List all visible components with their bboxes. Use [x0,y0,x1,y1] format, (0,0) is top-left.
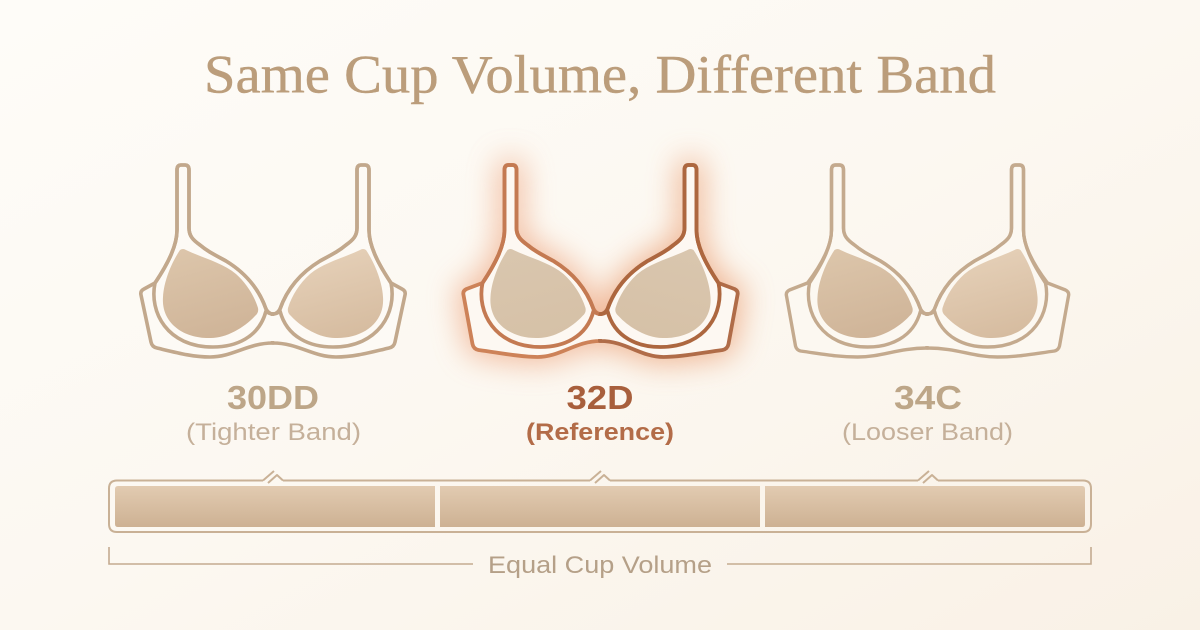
icon: 34C bra [786,165,1069,357]
label: 32D reference [526,379,674,446]
label: 30DD [186,379,361,446]
icon: 32D bra with glow [463,165,738,357]
segment: 34C [765,486,1085,527]
label: 34C: (Looser Band) [842,419,1013,446]
label: 30DD: 30DD [227,379,319,416]
bracket: equal cup volume [109,547,1091,579]
label: 30DD: (Tighter Band) [186,419,361,446]
label: 34C: 34C [894,379,962,416]
glow [463,165,738,357]
label: 32D reference: 32D [566,379,634,416]
label: 32D reference: (Reference) [526,419,674,446]
bar outline with notches [109,471,1091,532]
band bar [109,471,1091,532]
label: 34C [842,379,1013,446]
segment: 30DD [115,486,435,527]
bracket label: Equal Cup Volume [488,552,712,579]
segment: 32D [440,486,760,527]
title: Same Cup Volume, Different Band [204,44,996,104]
icon: 30DD bra [141,165,405,357]
